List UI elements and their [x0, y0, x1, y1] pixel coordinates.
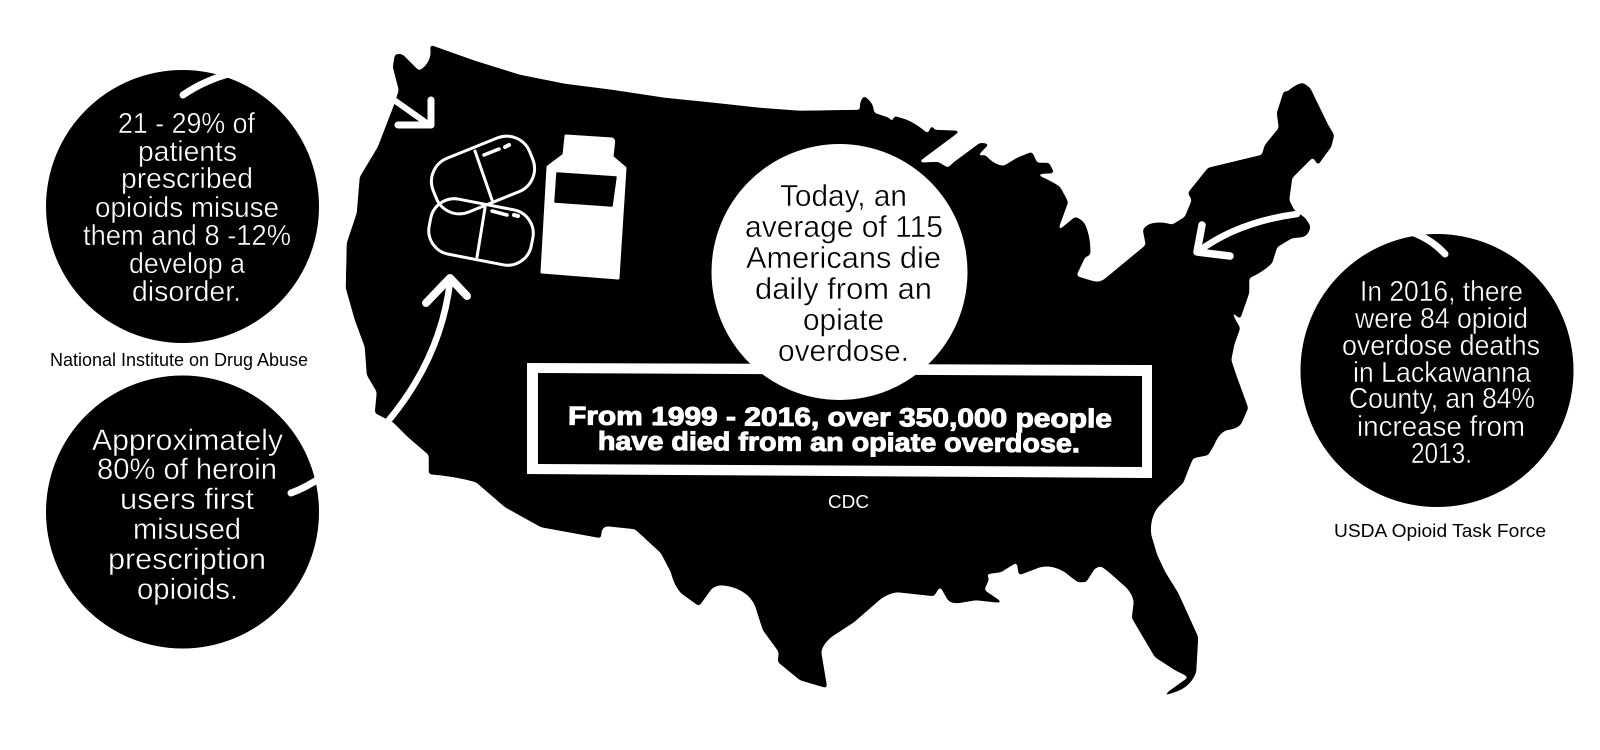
misuse statistic text: 21 - 29% of [118, 108, 256, 140]
panel: Lackawanna County statistic circle [1300, 233, 1574, 507]
arrow: from lower left coast to pills [389, 278, 467, 420]
heroin statistic text: users first [120, 483, 255, 516]
Lackawanna statistic text: overdose deaths [1342, 330, 1540, 362]
icon: two capsules [424, 129, 542, 269]
misuse statistic text: them and 8 -12% [83, 220, 291, 252]
source: National Institute on Drug Abuse: National Institute on Drug Abuse [50, 350, 308, 370]
Lackawanna statistic text: In 2016, there [1360, 276, 1523, 308]
pointer tick [291, 478, 320, 493]
heroin statistic text: opioids. [137, 573, 238, 606]
source: CDC: CDC [828, 492, 869, 512]
Lackawanna statistic text [1342, 276, 1540, 470]
centre circle text: average of 115 [745, 209, 943, 244]
heroin statistic text: prescription [108, 543, 266, 576]
banner text: From 1999 - 2016, over 350,000 people [568, 401, 1112, 433]
pointer tick [1414, 233, 1445, 254]
misuse statistic text: prescribed [121, 163, 253, 195]
banner text [568, 401, 1112, 458]
centre circle text: Today, an [780, 178, 907, 213]
arrow: from top left coast to pills [394, 100, 431, 125]
heroin statistic text: misused [133, 513, 241, 546]
centre circle text [745, 178, 943, 368]
heroin statistic text [92, 424, 283, 606]
centre circle text: opiate [803, 302, 884, 337]
misuse statistic text: opioids misuse [95, 192, 279, 224]
centre white circle with daily deaths [712, 144, 968, 400]
misuse statistic text [83, 108, 291, 308]
map of the United States [346, 45, 1334, 697]
panel: heroin statistic circle [46, 376, 320, 648]
misuse statistic text: develop a [129, 248, 246, 280]
misuse statistic text: patients [138, 136, 237, 168]
Lackawanna statistic text: in Lackawanna [1353, 357, 1532, 389]
Lackawanna statistic text: were 84 opioid [1354, 303, 1528, 335]
arrow: from north east to map [1197, 214, 1297, 256]
source: USDA Opioid Task Force: USDA Opioid Task Force [1334, 521, 1546, 541]
pointer tick [183, 73, 232, 95]
icon: pill bottle [542, 136, 625, 278]
Lackawanna statistic text: increase from [1357, 411, 1525, 443]
Lackawanna statistic text: 2013. [1411, 438, 1472, 470]
banner text: have died from an opiate overdose. [598, 426, 1080, 458]
heroin statistic text: 80% of heroin [97, 453, 277, 486]
Lackawanna statistic text: County, an 84% [1349, 383, 1535, 415]
misuse statistic text: disorder. [132, 276, 241, 308]
banner frame: deaths statistic [527, 363, 1152, 478]
heroin statistic text: Approximately [92, 424, 283, 457]
panel: misuse statistic circle [46, 70, 319, 343]
centre circle text: daily from an [755, 271, 932, 306]
centre circle text: Americans die [746, 240, 941, 275]
centre circle text: overdose. [778, 333, 909, 368]
